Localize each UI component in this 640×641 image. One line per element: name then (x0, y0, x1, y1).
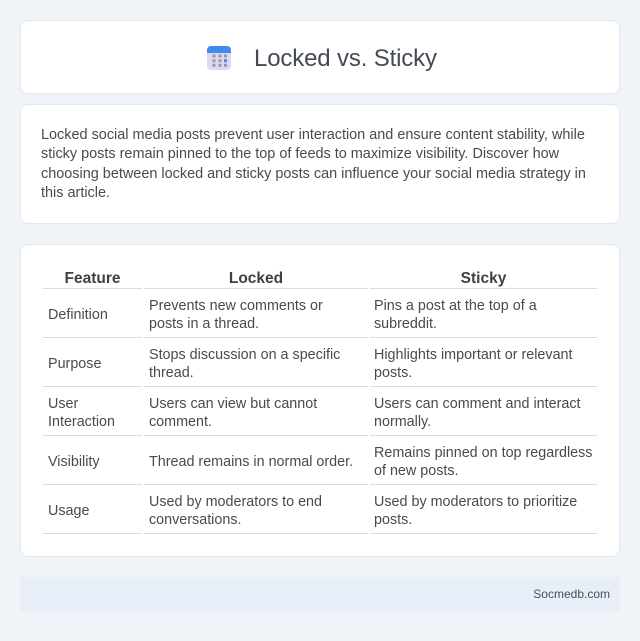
row: definition: Pins a post at the top of a (374, 298, 537, 314)
row: visibility: Remains pinned on top regardless (374, 445, 592, 461)
title card (20, 20, 620, 94)
footer source text: Socmedb.com (533, 587, 610, 601)
row: purpose (48, 347, 573, 381)
row: visibility: of new posts. (374, 463, 459, 479)
row: visibility: Visibility (48, 454, 100, 470)
row: user interaction (48, 396, 580, 430)
table panel (20, 244, 620, 557)
row: usage: Used by moderators to end (149, 494, 322, 510)
title: Locked vs. Sticky (254, 45, 437, 72)
row: user interaction: Interaction (48, 414, 115, 430)
intro text: this article. (41, 185, 110, 201)
row: definition: Definition (48, 307, 108, 323)
table header: Sticky (461, 270, 506, 287)
row: purpose: Stops discussion on a specific (149, 347, 340, 363)
row: user interaction: normally. (374, 414, 431, 430)
intro text: sticky posts remain pinned to the top of feeds to maximize visibility. Discover how (41, 146, 559, 162)
intro text: choosing between locked and sticky posts can influence your social media strategy in (41, 166, 586, 182)
intro text (41, 127, 586, 201)
row: definition (48, 298, 537, 332)
row: usage: conversations. (149, 512, 242, 528)
table header: Feature (64, 270, 120, 287)
row: definition: subreddit. (374, 316, 437, 332)
row: user interaction: User (48, 396, 78, 412)
row: usage: Used by moderators to prioritize (374, 494, 577, 510)
table header (64, 270, 506, 287)
row: definition: posts in a thread. (149, 316, 259, 332)
row: purpose: thread. (149, 365, 194, 381)
row: definition: Prevents new comments or (149, 298, 323, 314)
row: purpose: Purpose (48, 356, 101, 372)
intro text: Locked social media posts prevent user interaction and ensure content stability, while (41, 127, 585, 143)
row: usage: Usage (48, 503, 89, 519)
footer bar (20, 577, 620, 611)
table header: Locked (229, 270, 283, 287)
row: purpose: Highlights important or relevant (374, 347, 573, 363)
row: user interaction: Users can comment and interact (374, 396, 580, 412)
intro panel (20, 104, 620, 224)
row: purpose: posts. (374, 365, 412, 381)
row: visibility: Thread remains in normal order. (149, 454, 353, 470)
row: usage (48, 494, 577, 528)
row: visibility (48, 445, 592, 479)
row: usage: posts. (374, 512, 412, 528)
row: user interaction: Users can view but cannot (149, 396, 317, 412)
icon: calendar (207, 46, 231, 70)
row: user interaction: comment. (149, 414, 212, 430)
